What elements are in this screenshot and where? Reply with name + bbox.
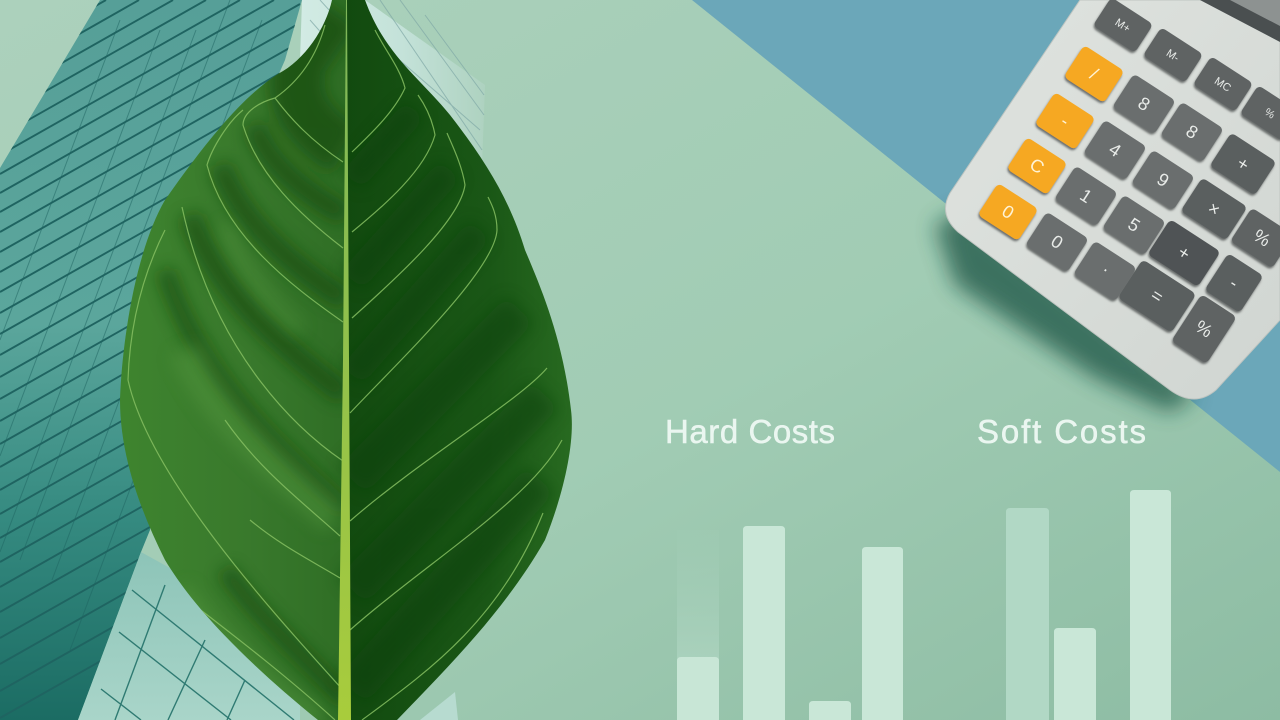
leaf left half: [100, 0, 346, 720]
orange keys: [978, 45, 1124, 241]
grey keys: =: [1147, 285, 1167, 307]
grey keys: 9: [1153, 169, 1173, 191]
heading: hard costs: Hard Costs: [665, 413, 835, 450]
calculator display: [1200, 0, 1280, 42]
calculator body: [946, 0, 1280, 399]
grey keys: 8: [1182, 121, 1202, 143]
grey keys: 8: [1134, 93, 1154, 115]
calculator shadow: [935, 210, 1195, 412]
building lower right glass: [420, 692, 458, 720]
heading: soft costs: Soft Costs: [977, 413, 1146, 450]
hard costs ghost bar: [677, 530, 719, 720]
leaf shading ridges: [165, 10, 345, 700]
grey keys: ·: [1098, 259, 1114, 279]
bar chart: soft costs: [1006, 490, 1171, 720]
blue diagonal panel: [692, 0, 1280, 472]
grey keys: [1025, 0, 1280, 364]
orange keys: C: [1026, 154, 1048, 178]
leaf: [100, 0, 585, 720]
grey keys: 5: [1124, 214, 1144, 236]
building: [0, 0, 485, 720]
grey keys: -: [1226, 273, 1242, 293]
grey keys: %: [1192, 316, 1216, 342]
leaf right half: [345, 0, 585, 720]
grey keys: M-: [1164, 47, 1181, 65]
orange keys: -: [1057, 111, 1073, 131]
building light side face: [300, 0, 485, 165]
bar chart: hard costs: [677, 526, 903, 720]
building light glass corner: [78, 552, 300, 720]
orange keys: /: [1086, 64, 1102, 84]
grey keys: +: [1233, 153, 1253, 175]
grey keys: %: [1262, 106, 1277, 122]
grey keys: +: [1174, 242, 1194, 264]
building dark facade: [0, 0, 302, 720]
grey keys: MC: [1212, 75, 1233, 95]
grey keys: 4: [1105, 139, 1125, 161]
grey keys: 0: [1047, 231, 1067, 253]
calculator: [935, 0, 1280, 412]
leaf left highlight bands: [180, 225, 335, 720]
leaf right shading: [352, 110, 545, 690]
leaf side veins: [128, 25, 562, 720]
orange keys: 0: [998, 201, 1018, 223]
leaf midrib: [338, 0, 351, 720]
grey keys: M+: [1113, 17, 1132, 35]
grey keys: ×: [1204, 198, 1224, 220]
grey keys: %: [1250, 225, 1274, 251]
grey keys: 1: [1076, 185, 1096, 207]
